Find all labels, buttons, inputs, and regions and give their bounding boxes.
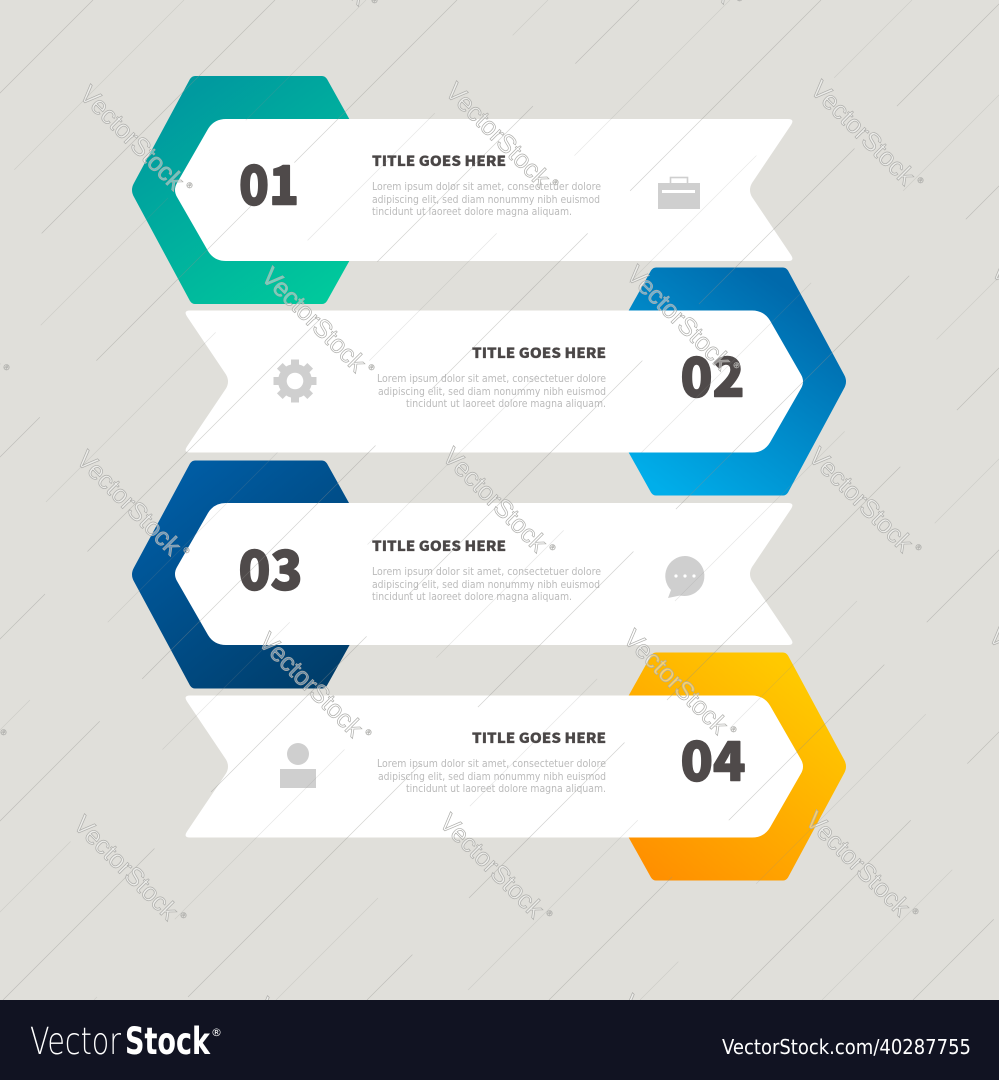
watermarks: VectorStock bbox=[68, 810, 183, 926]
watermarks: ® bbox=[363, 727, 374, 738]
watermarks: ® bbox=[913, 542, 924, 553]
title 01: TITLE GOES HERE bbox=[372, 151, 506, 171]
hexagon 04 bbox=[591, 652, 846, 880]
panel: step 02 bbox=[186, 268, 846, 496]
watermarks: ® bbox=[178, 910, 189, 921]
text 03: adipiscing elit, sed diam nonummy nibh euismod bbox=[372, 579, 600, 591]
text 02: Lorem ipsum dolor sit amet, consectetuer dolore bbox=[377, 373, 606, 385]
watermarks: ® bbox=[547, 542, 558, 553]
text 03: tincidunt ut laoreet dolore magna aliquam. bbox=[372, 591, 572, 603]
footer bar bbox=[0, 1000, 999, 1080]
hexagon 02 bbox=[591, 268, 846, 496]
number 04: 04 bbox=[680, 718, 746, 796]
text 02 bbox=[377, 373, 606, 410]
watermarks: VectorStock bbox=[618, 624, 733, 740]
text 01 bbox=[372, 181, 601, 218]
watermarks: ® bbox=[731, 360, 742, 371]
watermarks: VectorStock bbox=[434, 808, 549, 924]
watermarks: VectorStock bbox=[803, 442, 918, 558]
banner 01 bbox=[175, 119, 792, 261]
text 02: tincidunt ut laoreet dolore magna aliquam. bbox=[406, 398, 606, 410]
footer logo: ® bbox=[211, 1026, 222, 1039]
icon: briefcase bbox=[658, 178, 700, 209]
watermarks: VectorStock bbox=[71, 445, 186, 561]
banner 02 bbox=[186, 310, 803, 452]
watermarks: ® bbox=[184, 180, 195, 191]
text 04: Lorem ipsum dolor sit amet, consectetuer dolore bbox=[377, 758, 606, 770]
text 04 bbox=[377, 758, 606, 795]
icon: gear bbox=[274, 360, 316, 402]
watermarks: VectorStock bbox=[74, 80, 189, 196]
banner 04 bbox=[186, 696, 803, 838]
number 02: 02 bbox=[680, 334, 744, 412]
watermarks: VectorStock bbox=[440, 77, 555, 193]
number 01: 01 bbox=[239, 142, 299, 220]
text 01: Lorem ipsum dolor sit amet, consectetuer dolore bbox=[372, 181, 601, 193]
watermarks: VectorStock bbox=[800, 806, 915, 922]
watermarks: ® bbox=[728, 724, 739, 735]
footer logo: Stock bbox=[125, 1020, 211, 1063]
icon: chat bubble bbox=[665, 556, 704, 598]
watermarks: ® bbox=[1, 362, 12, 373]
watermarks: ® bbox=[910, 906, 921, 917]
panel: step 03 bbox=[132, 460, 792, 688]
watermarks: ® bbox=[550, 177, 561, 188]
text 03: Lorem ipsum dolor sit amet, consectetuer dolore bbox=[372, 566, 601, 578]
text 04: adipiscing elit, sed diam nonummy nibh euismod bbox=[378, 771, 606, 783]
footer url: VectorStock.com/40287755 bbox=[722, 1035, 971, 1059]
watermarks: ® bbox=[366, 362, 377, 373]
text 04: tincidunt ut laoreet dolore magna aliquam. bbox=[406, 783, 606, 795]
footer logo: Vector bbox=[30, 1020, 122, 1063]
watermarks: ® bbox=[915, 175, 926, 186]
watermarks: VectorStock bbox=[621, 260, 736, 376]
banner 03 bbox=[175, 503, 792, 645]
title 02: TITLE GOES HERE bbox=[472, 343, 606, 363]
text 01: tincidunt ut laoreet dolore magna aliquam. bbox=[372, 206, 572, 218]
footer logo bbox=[30, 1020, 222, 1063]
text 03 bbox=[372, 566, 601, 603]
icon: person bbox=[280, 743, 316, 788]
number 03: 03 bbox=[238, 526, 302, 606]
watermarks: VectorStock bbox=[805, 75, 920, 191]
text 02: adipiscing elit, sed diam nonummy nibh euismod bbox=[378, 386, 606, 398]
watermarks: ® bbox=[181, 545, 192, 556]
hexagon 03 bbox=[132, 460, 387, 688]
title 03: TITLE GOES HERE bbox=[372, 536, 506, 556]
panel: step 01 bbox=[132, 76, 792, 304]
text 01: adipiscing elit, sed diam nonummy nibh euismod bbox=[372, 194, 600, 206]
title 04: TITLE GOES HERE bbox=[472, 728, 606, 748]
panel: step 04 bbox=[186, 652, 846, 880]
watermarks: VectorStock bbox=[256, 262, 371, 378]
watermarks: VectorStock bbox=[253, 627, 368, 743]
watermarks: VectorStock bbox=[437, 442, 552, 558]
watermarks: ® bbox=[544, 908, 555, 919]
hexagon 01 bbox=[132, 76, 387, 304]
